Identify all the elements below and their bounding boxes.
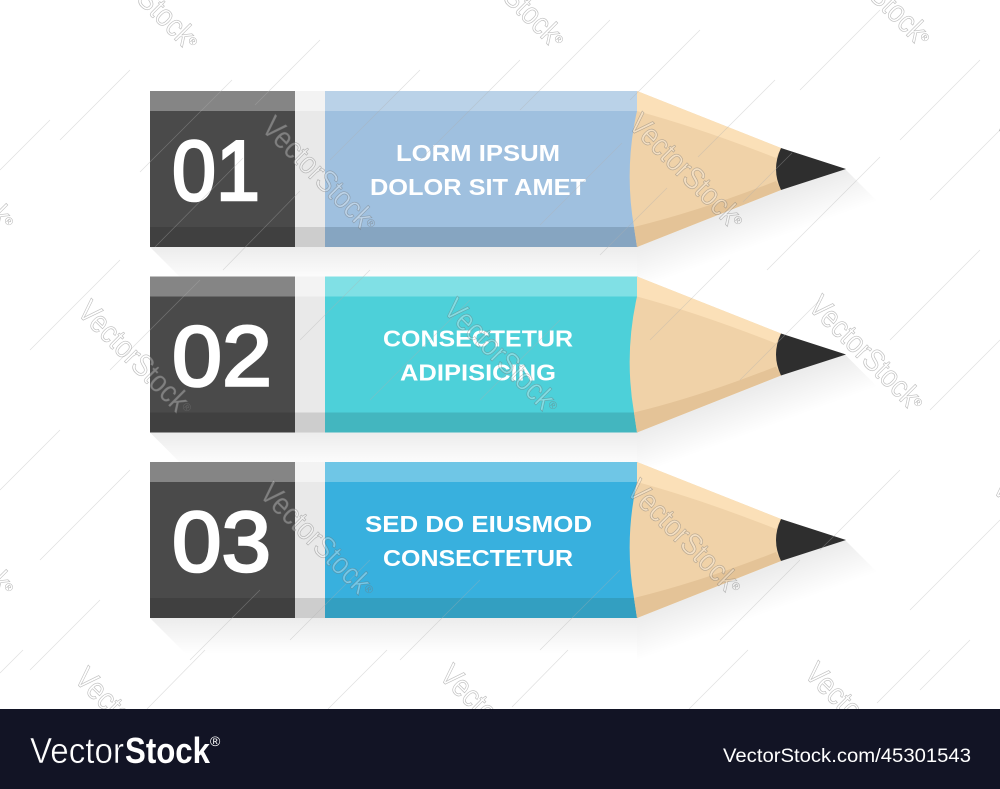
watermark row top [77, 0, 939, 57]
footer logo: Stock [125, 730, 211, 771]
pencil 1 body with label: DOLOR SIT AMET [370, 174, 587, 200]
pencil 1 [150, 91, 880, 290]
watermark row two: ® [179, 401, 193, 415]
watermark row one [0, 105, 1000, 239]
watermark row top: ® [185, 35, 199, 49]
pencil 3 wooden tip [630, 462, 781, 618]
pencil 3 body with label: SED DO EIUSMOD [365, 511, 592, 537]
pencil 3 body with label: CONSECTETUR [383, 545, 573, 571]
pencil 2 body with label: CONSECTETUR [383, 326, 573, 352]
watermark row three: ® [361, 583, 375, 597]
pencil 1 number block [150, 91, 295, 247]
pencil 2 body with label [325, 276, 638, 432]
watermark row two: VectorStock [802, 288, 928, 414]
pencil 2 number block [150, 276, 295, 432]
pencil 3 number block [150, 462, 295, 618]
watermark row one: ® [1, 215, 15, 229]
watermark row one: ® [730, 214, 744, 228]
footer logo [30, 730, 221, 771]
pencil 1 graphite point [776, 148, 846, 190]
footer logo: Vector [30, 730, 124, 771]
watermark row three [0, 470, 1000, 605]
watermark row top: ® [917, 31, 931, 45]
pencil 3 shadow [150, 540, 880, 661]
watermark row one: ® [363, 217, 377, 231]
pencil 2 [150, 276, 880, 476]
watermark row two [71, 288, 932, 423]
footer bar [0, 709, 1000, 789]
pencil 2 wooden tip [630, 276, 781, 432]
watermark row three: ® [1, 581, 15, 595]
pencil 1 number block: 01 [172, 124, 260, 219]
pencil 2 body with label: ADIPISICING [400, 360, 556, 386]
watermark row three: VectorStock [253, 475, 379, 601]
pencil 1 shadow [150, 169, 880, 290]
pencil 3 number block: 03 [172, 495, 271, 590]
watermark row bottom [68, 655, 924, 786]
watermark row two: ® [545, 399, 559, 413]
pencil 2 shadow [150, 354, 880, 476]
pencil 1 body with label [325, 91, 638, 247]
watermark row top: ® [551, 33, 565, 47]
watermark row one: VectorStock [622, 106, 748, 232]
pencil 2 graphite point [776, 334, 846, 376]
pencil 2 ferrule band [295, 276, 325, 432]
pencil 1 body with label: LORM IPSUM [396, 140, 560, 166]
watermark row one: VectorStock [255, 109, 381, 235]
watermark row two: VectorStock [437, 291, 563, 417]
footer image id: VectorStock.com/45301543 [723, 745, 971, 767]
pencil 3 ferrule band [295, 462, 325, 618]
pencil 3 [150, 462, 880, 661]
pencil 3 body with label [325, 462, 638, 618]
watermark row three: ® [728, 580, 742, 594]
pencil 2 number block: 02 [172, 310, 272, 404]
pencil 3 graphite point [776, 519, 846, 561]
watermark row two: VectorStock [71, 293, 197, 419]
watermark row two: ® [910, 396, 924, 410]
watermark row three: VectorStock [620, 472, 746, 598]
footer logo: ® [210, 733, 221, 749]
pencil 1 ferrule band [295, 91, 325, 247]
pencil 1 wooden tip [630, 91, 781, 247]
